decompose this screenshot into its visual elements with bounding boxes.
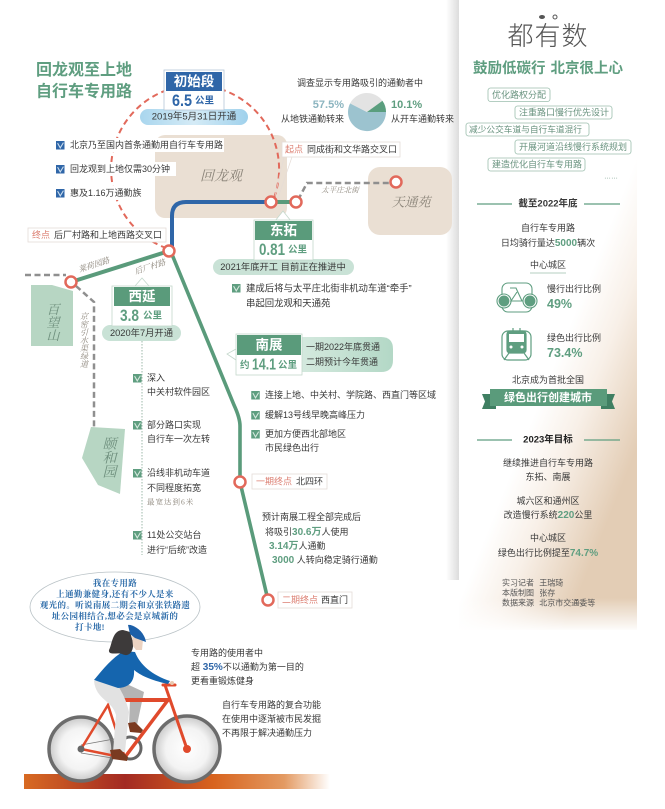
route: blue initial section (172, 202, 268, 248)
stat: green travel share (547, 332, 601, 360)
tags: measures (466, 88, 631, 180)
bicycle chainring and chain (81, 737, 141, 760)
stat: slow travel share: 慢行出行比例 (547, 283, 601, 294)
sidebar heading: 鼓励低碳行 北京很上心 (473, 59, 624, 77)
map area: beige district 天通苑 (368, 167, 452, 235)
text block: composite function: 在使用中逐渐被市民发掘 (222, 713, 321, 724)
speech bubble: 观光的。听说南展二期会和京张铁路遗 (40, 600, 190, 610)
survey with pie chart: 调查显示专用路吸引的通勤者中 (297, 77, 423, 88)
ribbon: green travel city: 绿色出行创建城市 (504, 390, 592, 404)
section: by end of 2022: 日均骑行量达5000辆次 (501, 237, 595, 248)
stat: slow travel share (547, 283, 601, 311)
section: 2023 goals (477, 434, 620, 558)
route: green south extension (171, 252, 268, 600)
label: phase two terminal (278, 592, 352, 608)
label: starting point: 起点 (285, 144, 303, 154)
tags: measures: …… (604, 174, 618, 180)
illustration: cyclist (49, 625, 220, 782)
text block: users (191, 647, 304, 686)
list: west extension: 深入 (147, 373, 165, 383)
badge: south extension: 二期预计今年贯通 (306, 356, 378, 367)
stat: slow travel share: 49% (547, 297, 572, 311)
bullet list: south extension: 市民绿色出行 (265, 442, 319, 453)
section: by end of 2022 (477, 198, 620, 273)
text block: users: 专用路的使用者中 (191, 647, 263, 658)
ribbon: green travel city (482, 374, 615, 409)
station nodes (66, 176, 402, 606)
map area: beige district 回龙观 (155, 135, 287, 218)
panel: right sidebar background (446, 0, 637, 632)
label: terminal: 终点 (32, 229, 50, 240)
route: red dashed loop of the initial section (111, 85, 279, 248)
title (36, 61, 132, 100)
road labels: 京密引水渠绿道 (78, 312, 88, 368)
survey with pie chart: 10.1% (391, 99, 422, 111)
map area: green park 百望山 (31, 285, 73, 346)
rider shoes (110, 722, 143, 761)
survey with pie chart: 从地铁通勤转来 (281, 113, 344, 124)
title: 回龙观至上地 (36, 61, 132, 79)
rider front leg (94, 681, 129, 752)
badge: initial section: 初始段 (174, 73, 215, 89)
map area: green park 颐和园: 颐和园 (100, 436, 116, 478)
badge: south extension: 一期2022年底贯通 (306, 341, 380, 352)
credits: 实习记者 王瑞琦 (502, 578, 563, 588)
bullet list: south extension (251, 389, 436, 453)
map area: green park 百望山: 百望山 (44, 302, 60, 342)
badge: south extension: 14.1 (252, 356, 276, 374)
label: starting point: 同成街和文华路交叉口 (307, 144, 397, 154)
tags: measures: 优化路权分配 (492, 89, 546, 100)
list: west extension: 部分路口实现 (147, 419, 201, 430)
bullet: east extension: 串起回龙观和天通苑 (246, 298, 331, 308)
badge: east extension: 2021年底开工 目前正在推进中 (220, 261, 346, 272)
credits: 数据来源 北京市交通委等 (502, 598, 595, 608)
logo: 都有数 (507, 21, 589, 51)
speech bubble: 打卡地! (75, 622, 105, 632)
label: terminal: 后厂村路和上地西路交叉口 (54, 229, 162, 240)
text block: users: 超 35%不以通勤为第一目的 (191, 661, 304, 672)
section: 2023 goals: 中心城区 (530, 532, 566, 543)
text block: projection: 3000 人转向稳定骑行通勤 (272, 554, 378, 566)
badge: south extension: 公里 (278, 360, 298, 371)
route: gray dashed greenway west (25, 275, 94, 428)
survey with pie chart: 从开车通勤转来 (391, 113, 454, 124)
label: phase one terminal (252, 474, 327, 489)
road labels: 莱荷园路 (77, 255, 112, 274)
badge: initial section: 6.5 (172, 91, 192, 110)
credits: 本版制图 张存 (502, 588, 555, 598)
bullet list: initial section: 回龙观到上地仅需30分钟 (70, 163, 170, 174)
tags: measures: 开展河道沿线慢行系统规划 (519, 141, 627, 152)
text block: composite function: 自行车专用路的复合功能 (222, 699, 321, 710)
section: by end of 2022: 自行车专用路 (521, 222, 575, 233)
badge: west extension: 3.8 (120, 306, 139, 325)
map area: beige district 天通苑: 天通苑 (391, 194, 432, 210)
speech bubble (30, 572, 200, 642)
road labels: 后厂村路 (133, 257, 168, 276)
road labels (77, 186, 360, 368)
badge: south extension (227, 334, 393, 375)
speech bubble: 址公园相结合,想必会是京城新的 (52, 611, 178, 621)
label: phase two terminal: 西直门 (321, 594, 348, 605)
rider torso and arm (94, 651, 170, 688)
badge: south extension: 南展 (256, 338, 283, 352)
route: green west extension (71, 251, 169, 282)
badge: west extension (102, 278, 181, 341)
tags: measures: 减少公交车道与自行车道混行 (469, 124, 582, 134)
section: 2023 goals: 东拓、南展 (525, 471, 571, 482)
badge: east extension (213, 211, 354, 275)
list: west extension: 沿线非机动车道 (147, 467, 210, 478)
bullet list: south extension: 缓解13号线早晚高峰压力 (265, 409, 365, 420)
map area: green park 颐和园 (82, 427, 125, 494)
list: west extension: 11处公交站台 (147, 529, 201, 540)
text block: users: 更看重锻炼健身 (191, 675, 254, 686)
text block: projection: 预计南展工程全部完成后 (262, 511, 361, 522)
label: phase two terminal: 二期终点 (282, 594, 318, 605)
bullet: east extension: 建成后将与太平庄北街非机动车道“牵手” (246, 282, 412, 294)
badge: east extension: 东拓 (270, 222, 297, 238)
bullet list: initial section: 惠及1.16万通勤族 (70, 187, 142, 198)
section: 2023 goals: 城六区和通州区 (516, 495, 580, 506)
badge: east extension: 公里 (288, 244, 308, 256)
list: west extension: 不同程度拓宽 (147, 482, 201, 493)
rider hair (109, 630, 133, 655)
road labels: 太平庄北街 (321, 186, 360, 194)
stat: green travel share: 73.4% (547, 346, 582, 360)
list: west extension: 自行车一次左转 (147, 433, 210, 444)
icon: train (502, 328, 531, 360)
section: 2023 goals: 继续推进自行车专用路 (503, 457, 593, 468)
credits (502, 578, 595, 608)
text block: projection: 将吸引30.6万人使用 (265, 526, 348, 538)
list: west extension: 进行“后统”改造 (147, 544, 207, 555)
speech bubble: 上通勤兼健身,还有不少人是来 (56, 589, 174, 599)
badge: initial section: 公里 (195, 96, 215, 106)
section: by end of 2022: 截至2022年底 (518, 198, 578, 210)
label: phase one terminal: 北四环 (296, 476, 323, 486)
bicycle frame (81, 685, 187, 758)
bullet list: initial section (56, 138, 224, 200)
title: 自行车专用路 (36, 82, 132, 100)
text block: projection: 3.14万人通勤 (269, 540, 325, 552)
label: phase one terminal: 一期终点 (256, 476, 292, 486)
badge: west extension: 西延 (128, 289, 156, 304)
stat: green travel share: 绿色出行比例 (547, 332, 601, 343)
route: gray dashed 太平庄北街 extension (298, 183, 392, 200)
map area: beige district 回龙观: 回龙观 (200, 168, 244, 184)
icon: bicycle (497, 283, 537, 312)
ground band (24, 774, 330, 789)
label: starting point (275, 142, 400, 198)
text block: composite function: 不再限于解决通勤压力 (222, 727, 312, 738)
badge: west extension: 公里 (143, 310, 163, 322)
section: 2023 goals: 绿色出行比例提至74.7% (498, 547, 598, 558)
text block: projection (262, 511, 378, 566)
rider rear leg (112, 680, 144, 725)
badge: south extension: 约 (240, 359, 250, 371)
badge: east extension: 0.81 (259, 240, 285, 259)
tags: measures: 注重路口慢行优先设计 (519, 106, 609, 118)
badge: west extension: 2020年7月开通 (110, 327, 173, 338)
ribbon: green travel city: 北京成为首批全国 (512, 374, 584, 385)
badge: initial section (140, 70, 248, 125)
bullet list: south extension: 连接上地、中关村、学院路、西直门等区域 (265, 389, 436, 400)
bullet: east extension (232, 282, 412, 308)
bullet list: initial section: 北京乃至国内首条通勤用自行车专用路 (70, 139, 223, 150)
section: 2023 goals: 2023年目标 (523, 434, 573, 446)
tags: measures: 建造优化自行车专用路 (492, 158, 582, 170)
bicycle wheels (49, 716, 220, 782)
speech bubble: 我在专用路 (93, 578, 137, 588)
rider face (132, 636, 143, 650)
bullet list: south extension: 更加方便西北部地区 (265, 428, 346, 439)
survey with pie chart: 57.5% (313, 99, 344, 111)
section: 2023 goals: 改造慢行系统220公里 (504, 509, 592, 520)
text block: composite function (222, 699, 321, 738)
rider helmet (128, 625, 146, 642)
survey with pie chart (281, 77, 454, 131)
section: by end of 2022: 中心城区 (530, 259, 566, 270)
badge: initial section: 2019年5月31日开通 (152, 110, 237, 122)
list: west extension: 中关村软件园区 (147, 386, 210, 397)
list: west extension: 最宽达到6米 (147, 496, 194, 506)
route: green east extension (271, 200, 296, 204)
list: west extension (133, 341, 210, 555)
label: terminal (28, 228, 166, 242)
